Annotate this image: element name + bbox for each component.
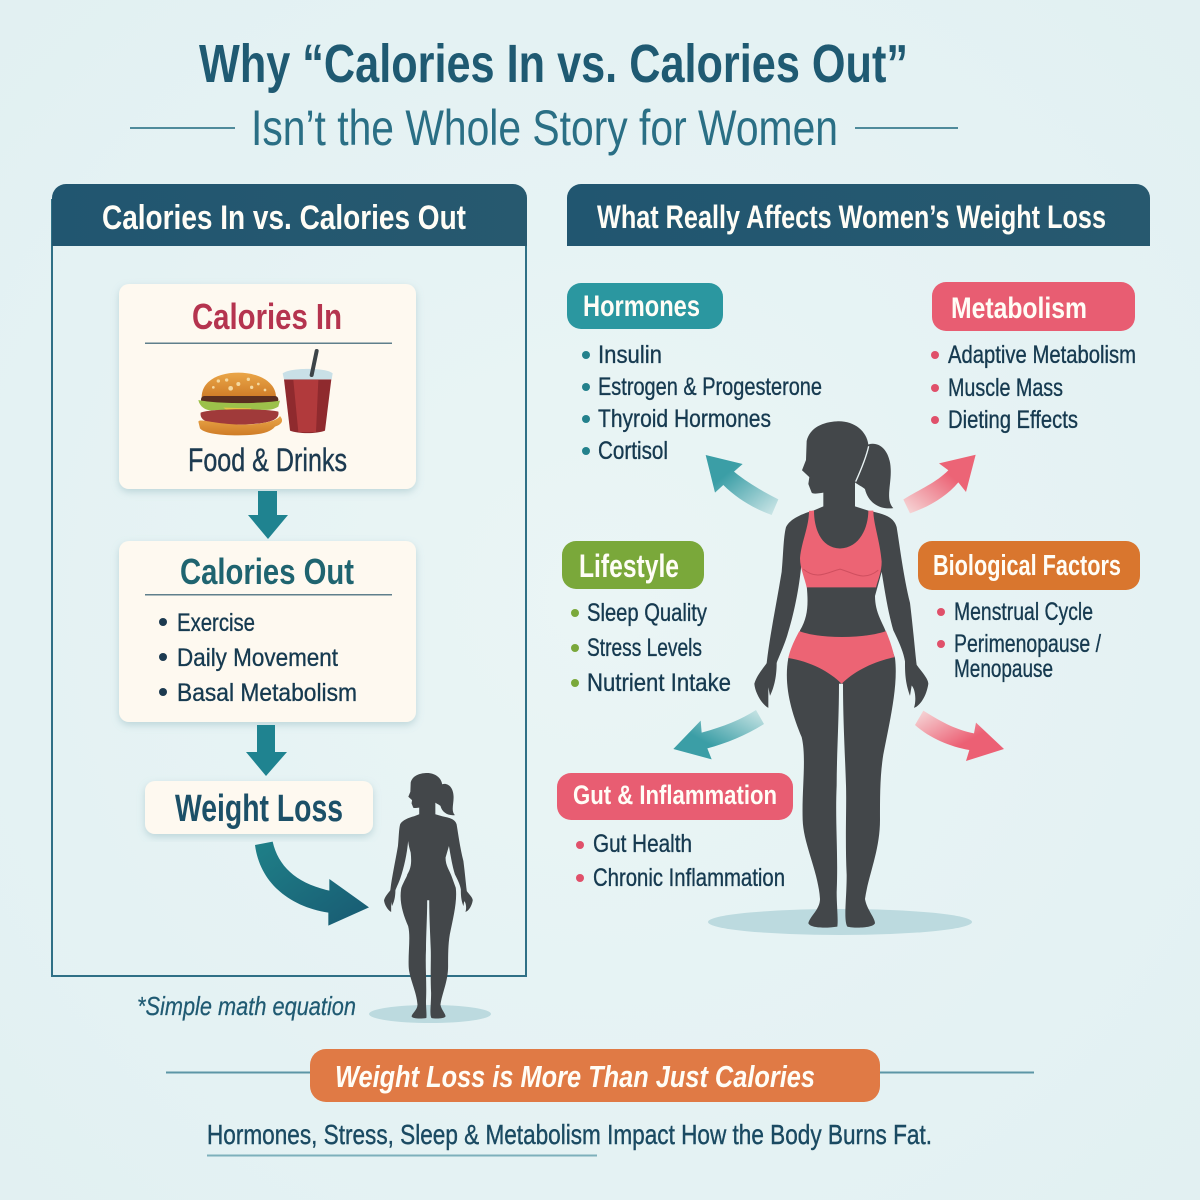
group: biological factors (918, 541, 1140, 683)
group: lifestyle: Stress Levels (587, 634, 702, 662)
title (130, 34, 958, 156)
card: calories out (119, 541, 416, 722)
panel: calories in vs calories out (52, 184, 527, 976)
title: Isn’t the Whole Story for Women (251, 100, 838, 156)
figure: large silhouette (708, 421, 972, 935)
figure: small silhouette (369, 773, 491, 1023)
group: hormones: Cortisol (598, 437, 668, 465)
arrow: to biological factors (915, 711, 1004, 761)
group: hormones: Estrogen & Progesterone (598, 373, 822, 401)
group: hormones: Insulin (598, 341, 662, 369)
group: biological factors: Biological Factors (933, 550, 1121, 582)
group: metabolism: Dieting Effects (948, 406, 1078, 434)
arrow: weight loss to figure (255, 842, 369, 926)
card: weight loss (145, 781, 373, 834)
card: weight loss: Weight Loss (175, 788, 343, 830)
panel heading: Calories In vs. Calories Out (102, 199, 466, 237)
group: biological factors: Menopause (954, 655, 1053, 683)
group: biological factors: Perimenopause / (954, 630, 1101, 658)
group: hormones: Thyroid Hormones (598, 405, 771, 433)
group: metabolism (931, 282, 1136, 434)
title: Why “Calories In vs. Calories Out” (199, 34, 908, 94)
group: lifestyle: Sleep Quality (587, 599, 707, 627)
card: calories out: Exercise (177, 609, 255, 637)
panel heading: what really affects (567, 184, 1150, 246)
arrow: in to out (248, 491, 288, 539)
group: hormones: Hormones (583, 290, 700, 323)
card: calories out: Calories Out (180, 551, 354, 592)
group: lifestyle: Lifestyle (579, 548, 679, 584)
card: calories out: Daily Movement (177, 644, 338, 672)
arrow: to hormones (706, 455, 778, 515)
group: lifestyle (562, 541, 731, 697)
group: gut and inflammation (557, 773, 793, 892)
footnote: *Simple math equation (137, 991, 356, 1021)
group: gut and inflammation: Gut & Inflammation (573, 780, 777, 810)
banner: key message (166, 1049, 1034, 1102)
group: biological factors: Menstrual Cycle (954, 598, 1093, 626)
group: gut and inflammation: Gut Health (593, 830, 692, 858)
group: gut and inflammation: Chronic Inflammation (593, 864, 785, 892)
arrow: out to weight loss (246, 725, 287, 776)
arrow: to metabolism (903, 455, 976, 513)
card: calories in (119, 284, 416, 489)
group: metabolism: Metabolism (951, 292, 1087, 325)
group: metabolism: Muscle Mass (948, 374, 1063, 402)
card: calories out: Basal Metabolism (177, 679, 357, 707)
card: calories in: Calories In (192, 296, 342, 337)
card: calories in: Food & Drinks (188, 442, 347, 478)
banner: key message: Weight Loss is More Than Just Calories (335, 1059, 815, 1094)
icon: burger and drink (198, 351, 333, 435)
group: lifestyle: Nutrient Intake (587, 669, 731, 697)
group: hormones (567, 283, 822, 465)
arrow: to gut and lifestyle (673, 710, 764, 759)
panel heading (52, 184, 527, 246)
group: metabolism: Adaptive Metabolism (948, 341, 1136, 369)
closing sentence: Hormones, Stress, Sleep & Metabolism Impact How the Body Burns Fat. (207, 1119, 932, 1150)
